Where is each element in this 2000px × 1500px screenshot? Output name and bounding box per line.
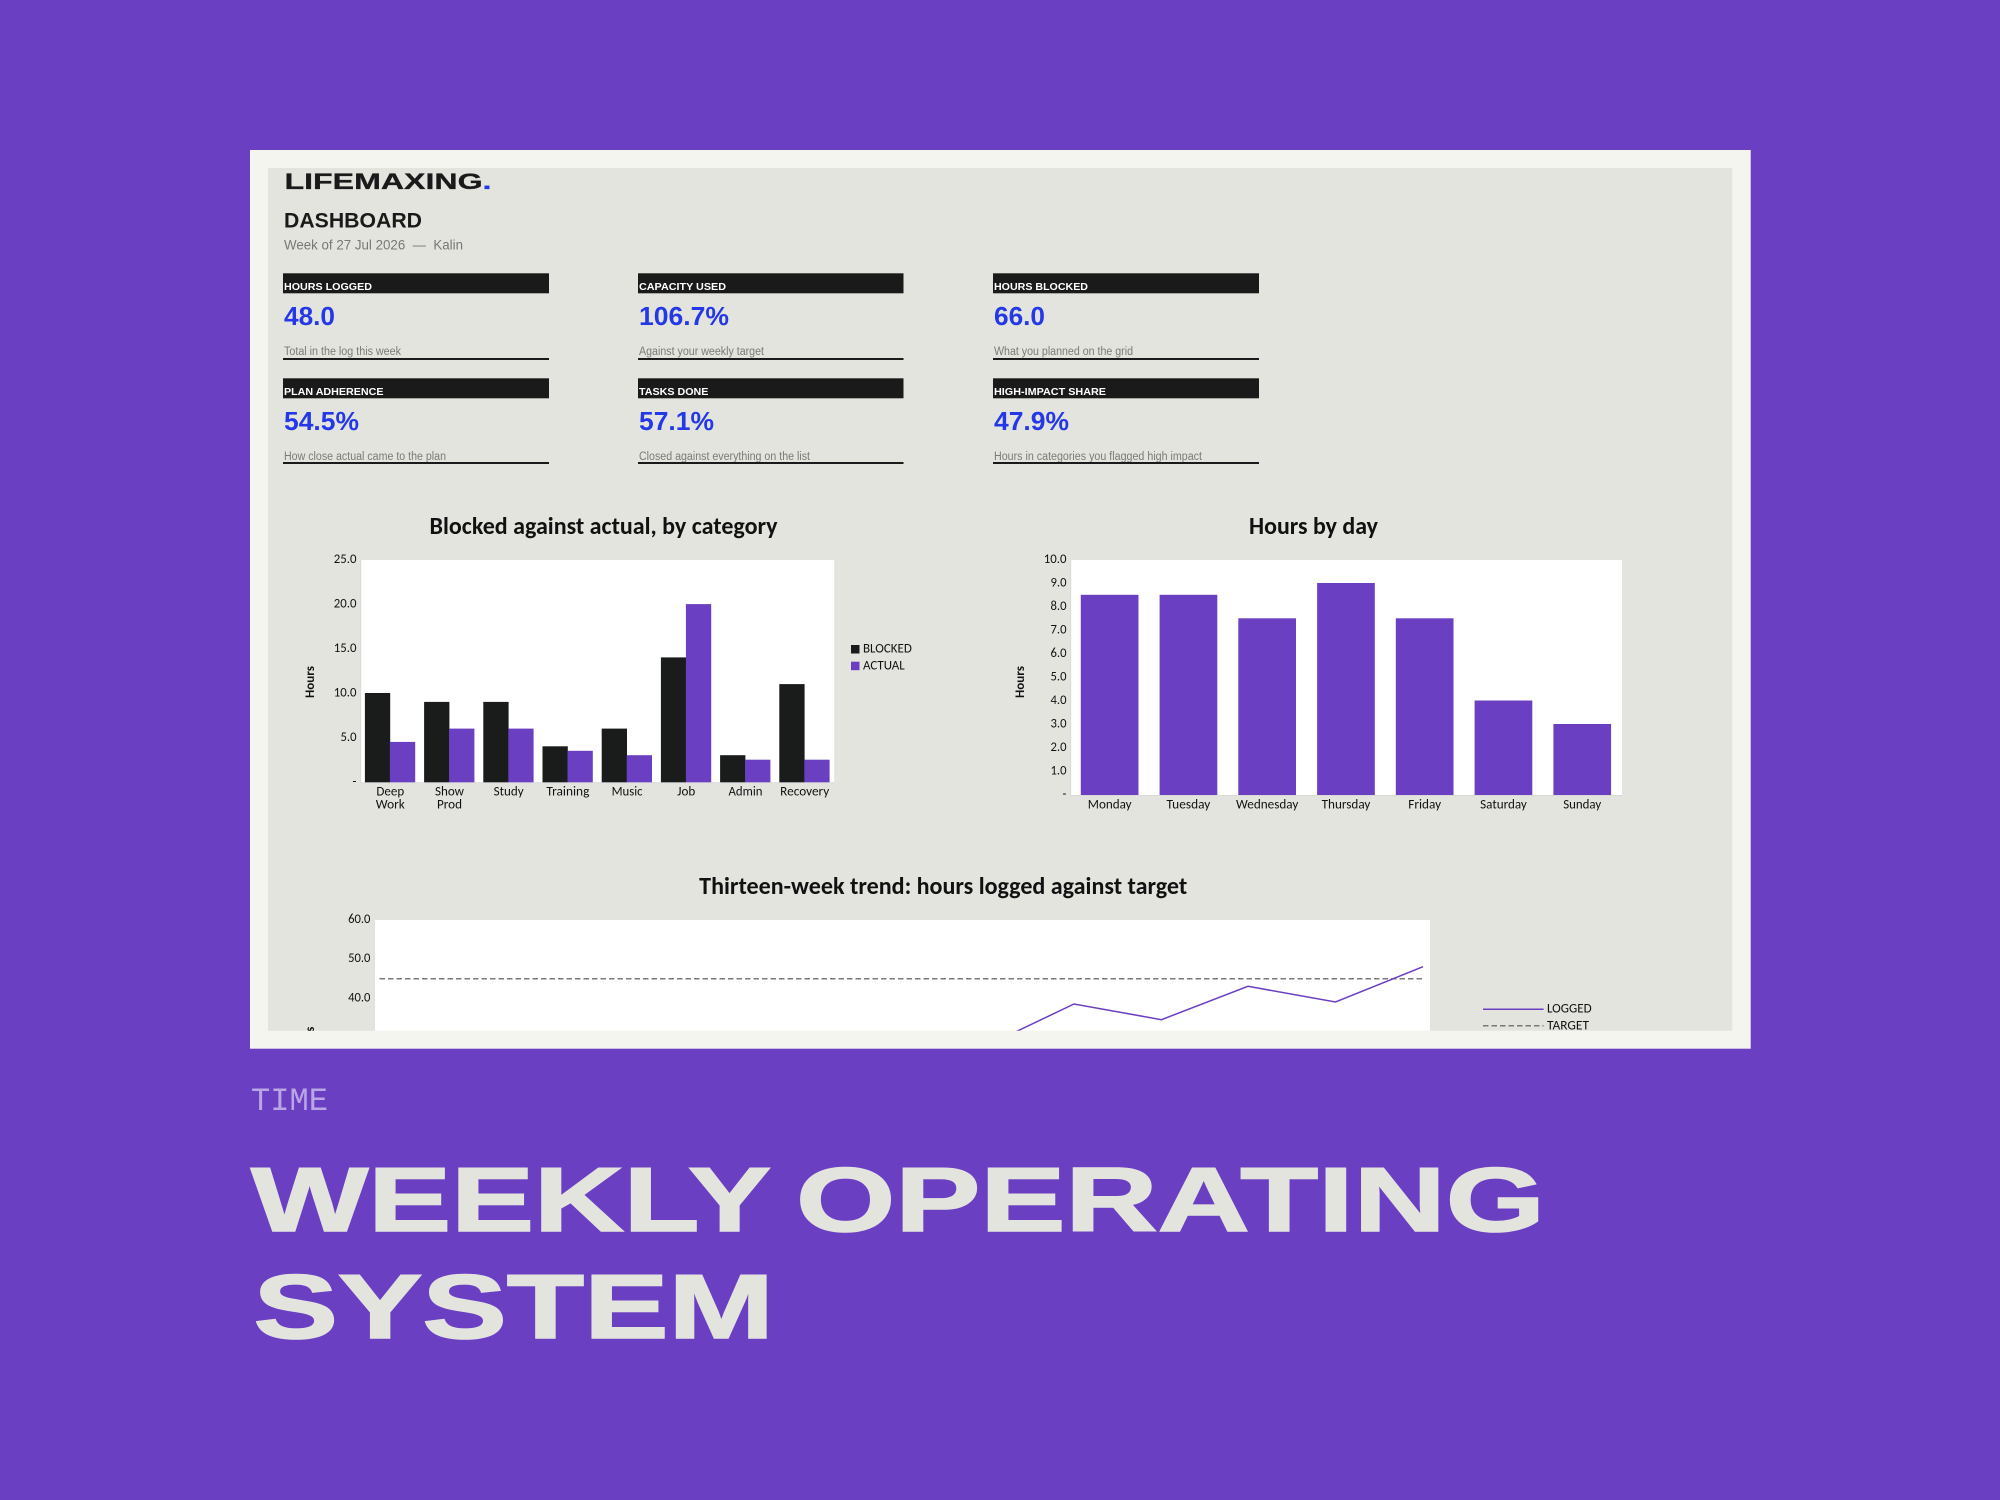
chart: blocked against actual by category: [303, 512, 912, 812]
y axis title: Hours: [303, 666, 318, 698]
x axis labels: Recovery: [780, 784, 829, 800]
main title: OPERATING: [796, 1150, 1545, 1251]
KPI: tasks done: Closed against everything on the list: [639, 451, 811, 463]
x axis labels: Sunday: [1563, 798, 1601, 813]
x axis labels: Monday: [1088, 798, 1132, 813]
x axis labels: Tuesday: [1166, 798, 1210, 813]
x axis labels: Saturday: [1480, 798, 1527, 813]
KPI: capacity used: 106.7%: [639, 301, 729, 331]
bars: blocked: [365, 657, 805, 782]
KPI: plan adherence: [283, 378, 549, 464]
y axis labels: -: [353, 774, 357, 789]
x axis labels: Wednesday: [1236, 798, 1298, 813]
x axis labels: [1088, 798, 1601, 813]
KPI: high-impact share: HIGH-IMPACT SHARE: [994, 386, 1106, 398]
KPI: capacity used: [638, 273, 904, 360]
x axis labels: Job: [677, 784, 695, 800]
KPI: high-impact share: Hours in categories you flagged high impact: [994, 451, 1203, 463]
y axis labels: 15.0: [334, 641, 357, 656]
x axis labels: Show: [435, 784, 465, 800]
x axis labels: Training: [546, 784, 589, 800]
y axis labels: 10.0: [334, 685, 357, 700]
x axis labels: [376, 784, 829, 812]
legend: BLOCKED: [863, 642, 912, 657]
y axis labels: 50.0: [348, 951, 371, 966]
x axis labels: Friday: [1408, 798, 1441, 813]
chart: thirteen-week trend (cropped by panel): [308, 877, 1592, 1031]
subheading: week and name: Week of 27 Jul 2026 — Kalin: [284, 237, 463, 253]
chart: hours by day: [1013, 512, 1622, 813]
y axis labels: 20.0: [334, 596, 357, 612]
x axis labels: Work: [376, 797, 405, 812]
logged line: [1016, 966, 1424, 1031]
legend: TARGET: [1547, 1019, 1590, 1034]
legend: ACTUAL: [863, 659, 905, 674]
y axis labels: [348, 912, 371, 1006]
legend: LOGGED: [1547, 1002, 1592, 1017]
KPI: hours blocked: 66.0: [994, 301, 1045, 331]
KPI: capacity used: Against your weekly target: [639, 346, 765, 358]
legend: [1483, 1004, 1592, 1030]
x axis labels: Admin: [728, 784, 763, 800]
y axis labels: 5.0: [1050, 670, 1067, 684]
y axis labels: -: [1063, 787, 1067, 802]
KPI: tasks done: TASKS DONE: [639, 386, 708, 398]
KPI: plan adherence: How close actual came to the plan: [284, 451, 446, 463]
y axis labels: 2.0: [1050, 740, 1067, 755]
KPI: high-impact share: [993, 378, 1259, 464]
legend: [851, 642, 912, 674]
y axis labels: 10.0: [1044, 552, 1067, 567]
x axis labels: Thursday: [1322, 798, 1371, 813]
target line: [380, 978, 1423, 980]
y axis labels: 3.0: [1050, 716, 1067, 732]
KPI: capacity used: CAPACITY USED: [639, 281, 726, 293]
y axis labels: 8.0: [1050, 599, 1067, 614]
KPI: hours blocked: What you planned on the grid: [994, 346, 1133, 358]
KPI: tasks done: [638, 378, 904, 464]
y axis labels: 25.0: [334, 552, 357, 567]
x axis labels: Deep: [376, 784, 404, 800]
main title: WEEKLY: [251, 1150, 771, 1251]
y axis labels: 60.0: [348, 912, 371, 927]
panel: dashboard screenshot card: [250, 150, 1751, 1059]
x axis labels: Music: [612, 784, 643, 800]
category label: TIME: [251, 1083, 328, 1120]
KPI: tasks done: 57.1%: [639, 406, 714, 436]
KPI: hours blocked: [993, 273, 1259, 360]
heading: dashboard: DASHBOARD: [284, 210, 422, 233]
x axis labels: Study: [494, 784, 524, 800]
y axis labels: 4.0: [1050, 693, 1067, 708]
y axis labels: 40.0: [348, 990, 371, 1006]
KPI: hours logged: HOURS LOGGED: [284, 281, 372, 293]
y axis labels: 9.0: [1050, 576, 1067, 590]
x axis labels: Prod: [437, 797, 462, 812]
logo: LIFEMAXING: LIFEMAXING .: [284, 169, 492, 194]
KPI: plan adherence: PLAN ADHERENCE: [284, 386, 384, 398]
y axis labels: [1044, 552, 1067, 802]
main title: SYSTEM: [254, 1257, 774, 1358]
y axis labels: 5.0: [340, 730, 357, 745]
y axis labels: 6.0: [1050, 646, 1067, 661]
chart title: Hours by day: [1249, 512, 1379, 541]
KPI: hours logged: Total in the log this week: [284, 346, 401, 358]
y axis labels: 1.0: [1050, 764, 1067, 778]
KPI: hours logged: [283, 273, 549, 360]
chart title: Blocked against actual, by category: [430, 512, 778, 541]
KPI: hours blocked: HOURS BLOCKED: [994, 281, 1088, 293]
bars: hours per day: [1081, 583, 1611, 795]
KPI: high-impact share: 47.9%: [994, 406, 1069, 436]
main title: [251, 1150, 1545, 1358]
y axis title: Hours: [303, 1027, 318, 1059]
y axis title: Hours: [1013, 666, 1028, 698]
y axis labels: [334, 552, 357, 789]
KPI: hours logged: 48.0: [284, 301, 335, 331]
y axis labels: 7.0: [1050, 622, 1067, 638]
KPI: plan adherence: 54.5%: [284, 406, 359, 436]
bars: actual: [390, 604, 830, 782]
infographic canvas: [250, 150, 1751, 1340]
chart title: Thirteen-week trend: hours logged against target: [699, 872, 1187, 901]
